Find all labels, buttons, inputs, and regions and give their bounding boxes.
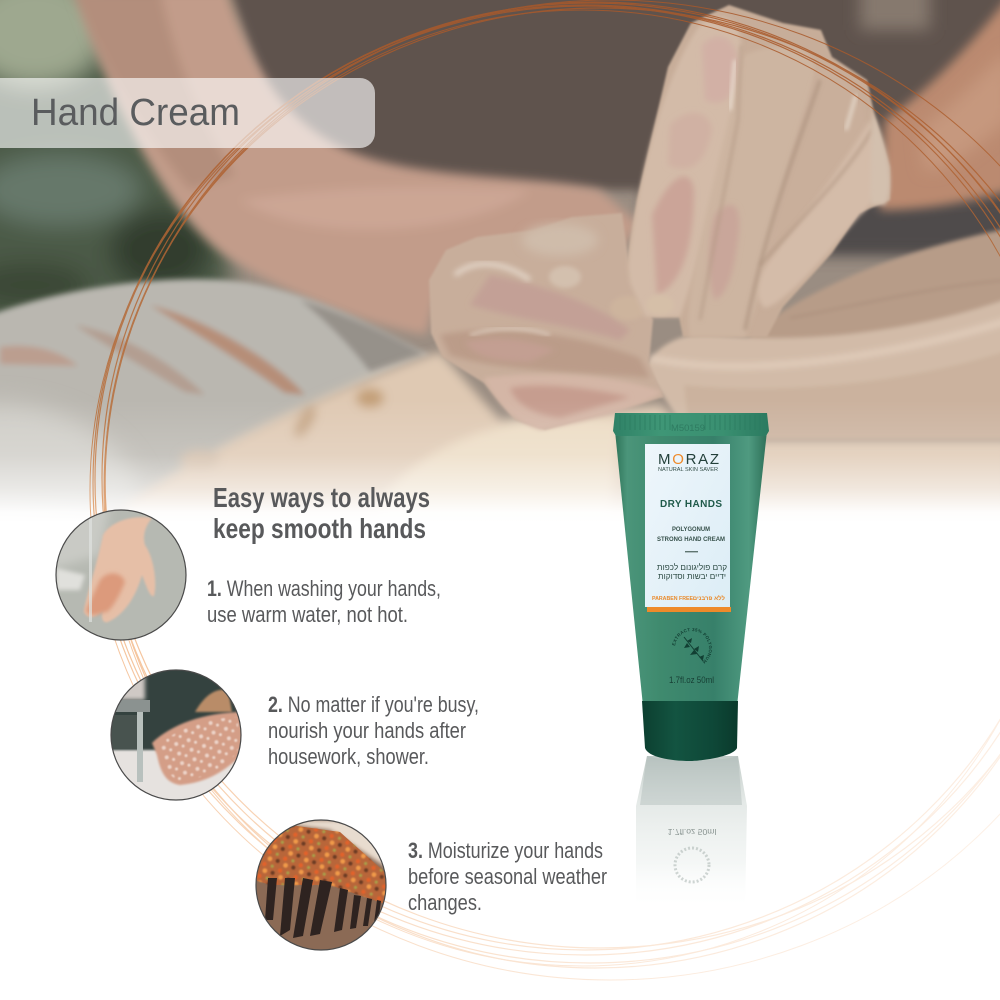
tip 2 text: nourish your hands after <box>268 718 466 743</box>
brand: MORAZ <box>658 451 719 468</box>
heading: Easy ways to always <box>213 482 430 513</box>
tip 2 text: 2. No matter if you're busy, <box>268 692 479 717</box>
heading: keep smooth hands <box>213 513 426 544</box>
upper clay-covered hand <box>626 5 890 337</box>
tip 3 text: changes. <box>408 890 482 915</box>
white fade over photo bottom <box>0 400 1000 522</box>
volume text: 1.7fl.oz 50ml <box>669 675 714 686</box>
paraben free strip: PARABEN FREE <box>652 596 693 602</box>
blurred green foliage background <box>0 0 230 340</box>
tube crimp <box>613 413 769 436</box>
tube label: NATURAL SKIN SAVER <box>658 467 718 473</box>
photo circle 2: soapy hands at tap <box>110 670 245 805</box>
pottery wheel <box>125 352 1000 522</box>
tube label <box>645 444 731 612</box>
tip 1 text: use warm water, not hot. <box>207 602 408 627</box>
product reflection <box>636 756 747 910</box>
tube label: POLYGONUM <box>672 526 710 533</box>
tube crimp: M50159 <box>671 423 705 433</box>
tube body <box>615 431 767 706</box>
header panel <box>0 78 375 148</box>
title: Hand Cream <box>31 92 240 134</box>
polygonum leaf emblem: EXTRACT 35% POLYGONUM <box>672 628 712 664</box>
hero photo: potter's hands shaping clay <box>0 0 1000 525</box>
heading <box>213 482 430 544</box>
product name: DRY HANDS <box>660 499 722 510</box>
clay bowl <box>644 228 1000 440</box>
lower clay-covered hand <box>429 213 664 430</box>
tip 1 text: 1. When washing your hands, <box>207 576 441 601</box>
tube label: STRONG HAND CREAM <box>657 536 725 543</box>
right forearm <box>880 0 1000 210</box>
tube label: ללא פרבנים <box>693 594 726 602</box>
tip 3 text: 3. Moisturize your hands <box>408 838 603 863</box>
tip 2 text: housework, shower. <box>268 744 429 769</box>
product: green hand cream tube <box>613 413 769 761</box>
tube label: ידיים יבשות וסדוקות <box>658 572 726 581</box>
product reflection: 1.7fl.oz 50ml <box>668 827 716 837</box>
hebrew claim: קרם פוליגונום לכפות <box>657 563 727 572</box>
apron and lap <box>0 275 428 492</box>
tip 2 text <box>268 692 479 769</box>
tip 3 text <box>408 838 607 915</box>
dark shirt <box>231 0 1000 204</box>
tip 1 text <box>207 576 441 627</box>
tip 3 text: before seasonal weather <box>408 864 607 889</box>
photo circle 1: hand under water <box>55 509 187 641</box>
photo circle 3: autumn vineyard <box>255 820 390 955</box>
tube cap <box>642 701 738 761</box>
upper left arm and forearm <box>72 0 640 335</box>
